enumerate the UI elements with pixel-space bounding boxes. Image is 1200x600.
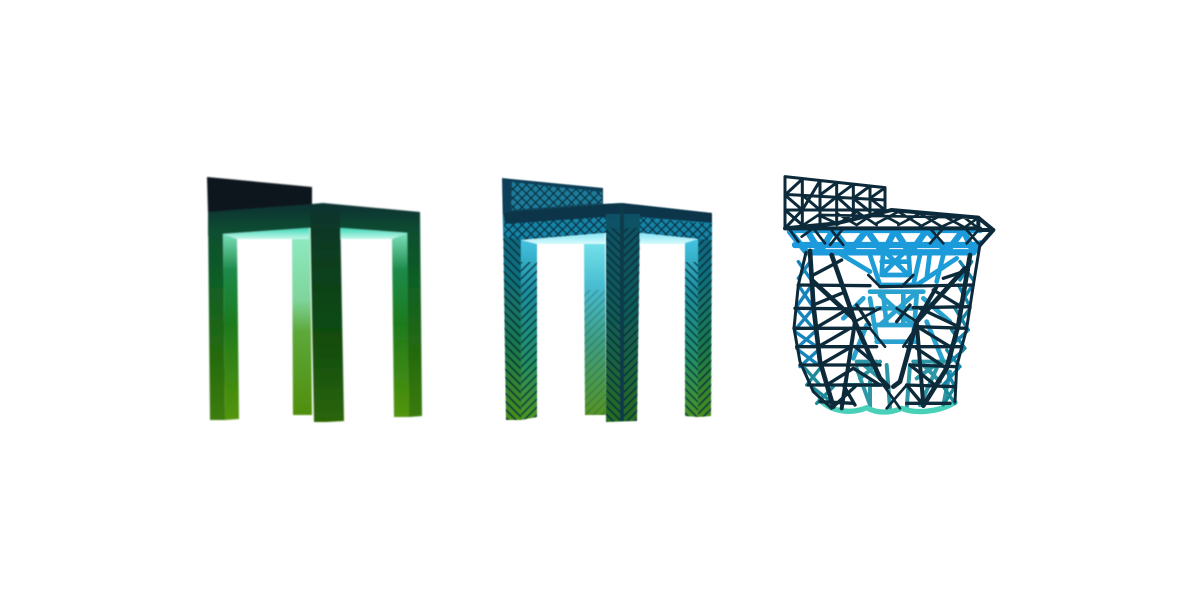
main arches (810, 251, 970, 407)
seat rails (208, 203, 420, 236)
underside glow (223, 228, 309, 239)
left leg inner face (223, 234, 239, 420)
dark structural members (785, 177, 993, 408)
blue lattice (790, 230, 980, 412)
side blue members (795, 262, 818, 367)
outer verticals (794, 244, 980, 408)
backrest (502, 178, 603, 230)
backrest grid (785, 177, 885, 228)
left leg outer face (208, 212, 225, 420)
corner leg (606, 214, 640, 422)
seat rails (503, 203, 712, 240)
corner leg (310, 204, 326, 422)
right leg inner face (392, 233, 409, 417)
seat top band (785, 210, 993, 244)
rear blue members (837, 248, 957, 285)
stool 3: topology-optimised truss (785, 177, 993, 412)
stool 2: lattice infill (502, 178, 712, 422)
rows (794, 285, 973, 403)
right leg outer face (407, 212, 422, 417)
left leg (521, 240, 537, 420)
stool 1: solid (207, 177, 422, 422)
backrest (207, 177, 312, 213)
back leg (584, 233, 606, 415)
back leg (292, 228, 312, 415)
underside glow (521, 233, 605, 244)
diagonals (813, 260, 968, 407)
right leg (685, 239, 698, 417)
seat underside band (790, 230, 980, 253)
